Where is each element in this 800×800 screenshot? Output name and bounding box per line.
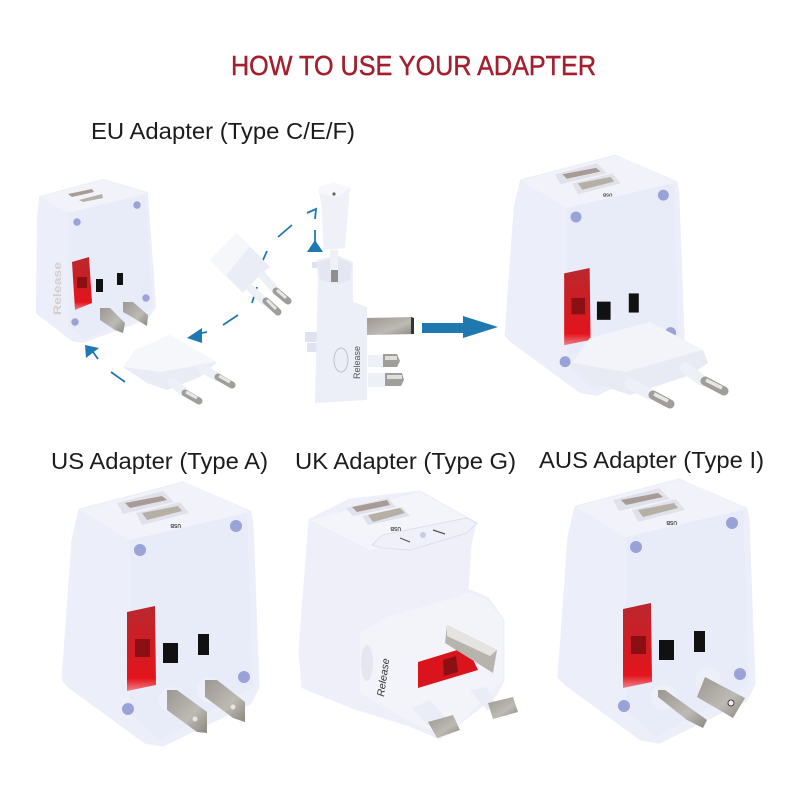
release text: Release (352, 346, 362, 379)
label: UK adapter: UK Adapter (Type G) (295, 448, 516, 474)
release button (334, 348, 348, 372)
middle EU plug (210, 233, 288, 312)
arrow tip: up (307, 240, 323, 252)
title: HOW TO USE YOUR ADAPTER (231, 50, 596, 81)
US adapter (63, 483, 258, 745)
AUS adapter: USB (666, 519, 677, 525)
bottom EU plug (123, 335, 232, 401)
US adapter: USB (170, 522, 181, 528)
large EU adapter with plug (506, 156, 724, 404)
lower pins (368, 355, 385, 387)
arrow tip: to adapter (85, 345, 99, 358)
label: US adapter: US Adapter (Type A) (51, 448, 268, 474)
UK adapter with plug being pulled out (305, 182, 414, 403)
blade (367, 317, 414, 335)
small adapter with US prongs (37, 180, 155, 342)
release text: Release (375, 657, 392, 697)
EU plug inserted (572, 322, 724, 404)
arrow tip: left (187, 328, 202, 343)
AUS adapter (559, 480, 754, 742)
label: AUS adapter: AUS Adapter (Type I) (539, 447, 764, 473)
side text: Release: Release (52, 262, 64, 315)
UK adapter: USB (390, 525, 401, 531)
big blue arrow (422, 316, 498, 338)
dashed arrow path from plug to adapter (93, 209, 316, 382)
UK adapter (300, 492, 518, 738)
label: EU adapter: EU Adapter (Type C/E/F) (91, 118, 355, 144)
large EU adapter with plug: USB (602, 192, 612, 197)
